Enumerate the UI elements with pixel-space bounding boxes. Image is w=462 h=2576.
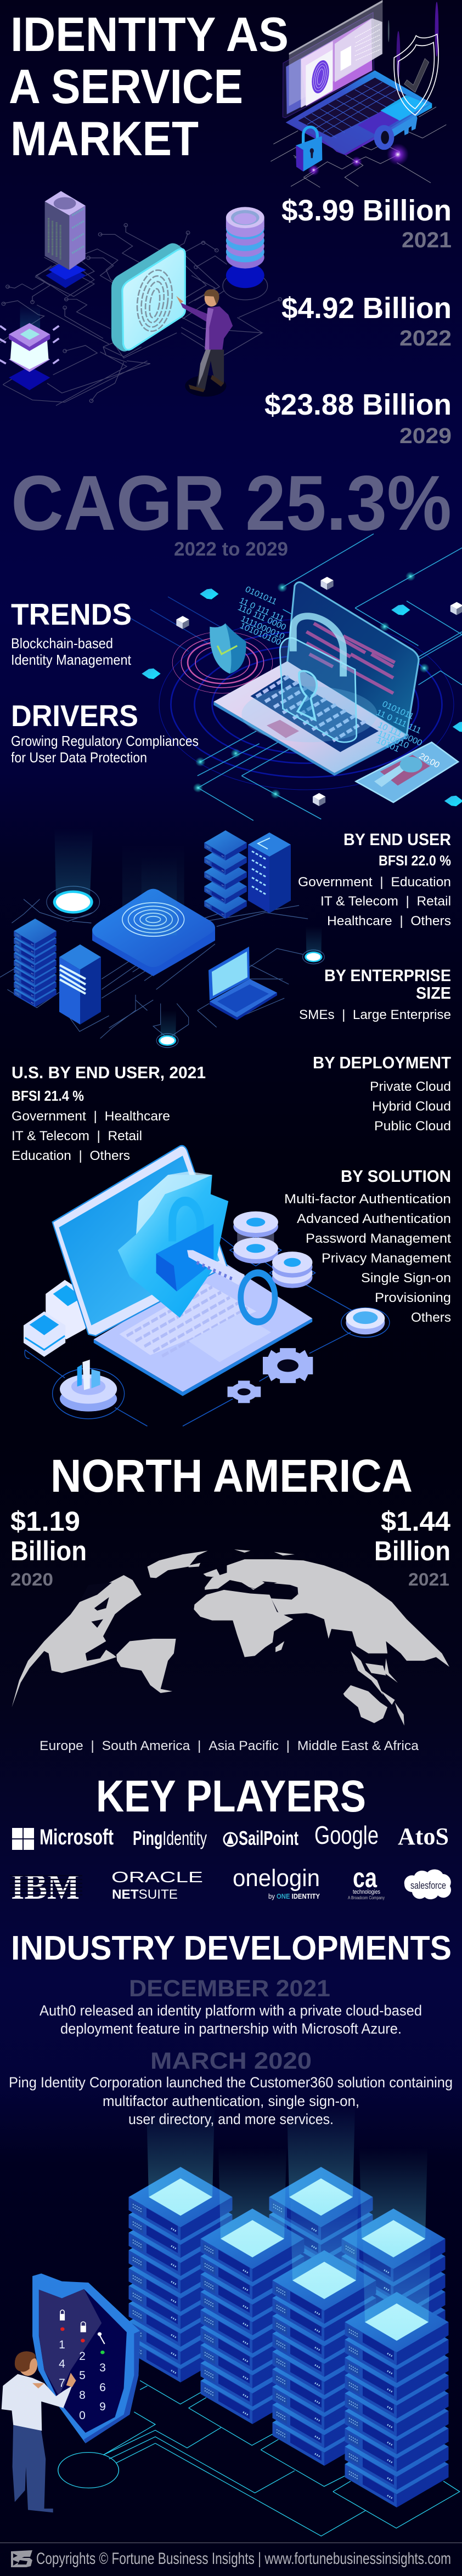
- fingerprint: [309, 59, 332, 95]
- server tower back left: [269, 2107, 373, 2382]
- U.S. by end user: Education | Others: [12, 1148, 130, 1163]
- logo: Google: Google: [314, 1821, 379, 1849]
- industry developments heading: INDUSTRY DEVELOPMENTS: [11, 1929, 452, 1967]
- title: [9, 7, 289, 166]
- market values: 2022: [399, 326, 452, 350]
- U.S. by end user: [12, 1063, 206, 1163]
- logo: Salesforce: salesforce: [410, 1880, 446, 1891]
- by end user: BFSI 22.0 %: [379, 852, 451, 869]
- logo: Oracle NetSuite: [111, 1869, 203, 1902]
- market values: 2021: [402, 228, 452, 252]
- by solution: Advanced Authentication: [297, 1211, 451, 1226]
- phone: 20:00: [417, 751, 441, 770]
- security shield keypad: 9: [99, 2401, 106, 2413]
- laptop base: [213, 661, 407, 773]
- north america 2020 value: [10, 1506, 87, 1589]
- title: MARKET: [10, 111, 199, 166]
- logo: Oracle NetSuite: ORACLE: [111, 1869, 203, 1886]
- illustration: glass padlock laptop with shield and phone: 11 0 111 111: [238, 596, 285, 624]
- security shield keypad: 4: [59, 2358, 65, 2370]
- by deployment: Hybrid Cloud: [372, 1099, 451, 1114]
- industry development: March 2020: [9, 2048, 453, 2127]
- by end user: IT & Telecom | Retail: [320, 894, 451, 909]
- drivers: [11, 699, 199, 766]
- by deployment: Public Cloud: [374, 1119, 451, 1134]
- drivers: for User Data Protection: [11, 749, 147, 766]
- logo: IBM: IBM: [11, 1867, 80, 1907]
- by solution: Password Management: [306, 1231, 451, 1246]
- by solution: Others: [411, 1310, 451, 1325]
- trends: Identity Management: [11, 652, 132, 668]
- logo: CA Technologies: [348, 1862, 385, 1900]
- logo: CA Technologies: A Broadcom Company: [348, 1895, 385, 1900]
- key: [391, 115, 418, 137]
- by solution: BY SOLUTION: [341, 1167, 451, 1186]
- chart disk: [60, 1360, 117, 1412]
- illustration: glass padlock laptop with shield and phone: 1111000010: [239, 614, 286, 642]
- security shield keypad: 2: [79, 2350, 86, 2363]
- north america 2021 value: 2021: [408, 1570, 449, 1589]
- logo: CA Technologies: technologies: [353, 1889, 380, 1895]
- north america heading: NORTH AMERICA: [50, 1450, 413, 1502]
- logo: OneLogin: onelogin: [233, 1865, 320, 1892]
- industry development: December 2021: DECEMBER 2021: [129, 1975, 330, 2002]
- by deployment: BY DEPLOYMENT: [313, 1053, 451, 1072]
- CAGR: 2022 to 2029: [174, 539, 288, 560]
- server tower front left: [128, 2107, 233, 2382]
- title: A SERVICE: [9, 59, 243, 114]
- logo: Ping Identity: PingIdentity: [133, 1827, 207, 1849]
- by solution: Provisioning: [375, 1290, 451, 1305]
- logo: CA Technologies: ca: [353, 1862, 378, 1893]
- man: [176, 289, 233, 397]
- man using keypad: [2, 2351, 76, 2512]
- gears: [228, 1348, 313, 1403]
- small shield: [210, 624, 246, 673]
- market values: $23.88 Billion: [264, 388, 452, 421]
- other regions: Europe | South America | Asia Pacific | Middle East & Africa: [40, 1739, 419, 1753]
- server stack left: [14, 919, 57, 1007]
- U.S. by end user: U.S. BY END USER, 2021: [12, 1063, 206, 1082]
- fingerprint pad: [92, 889, 215, 976]
- logo: Microsoft: Microsoft: [40, 1825, 114, 1849]
- left devices: [24, 1280, 88, 1357]
- glass screens: [289, 0, 382, 106]
- trends: Blockchain-based: [11, 635, 113, 652]
- floating disks: [233, 1211, 385, 1334]
- main laptop: [53, 1146, 312, 1396]
- drivers: Growing Regulatory Compliances: [11, 733, 199, 749]
- logo: OneLogin: by ONE IDENTITY: [268, 1892, 320, 1900]
- laptop screen: [288, 582, 419, 735]
- padlock: [172, 1201, 200, 1242]
- U.S. by end user: BFSI 21.4 %: [12, 1088, 84, 1104]
- industry development: December 2021: deployment feature in partnership with Microsoft Azure.: [60, 2020, 402, 2037]
- database: [226, 207, 264, 288]
- server tower back right: [341, 2148, 446, 2424]
- security shield keypad: 6: [99, 2381, 106, 2394]
- logo: Oracle NetSuite: NETSUITE: [112, 1887, 178, 1902]
- shield outline: [394, 34, 438, 115]
- key players heading: KEY PLAYERS: [96, 1771, 366, 1821]
- key: [187, 1250, 245, 1285]
- security shield keypad: 7: [59, 2377, 65, 2390]
- security shield keypad: 1: [59, 2339, 65, 2351]
- by enterprise size: SIZE: [416, 983, 451, 1003]
- market values: $3.99 Billion: [281, 194, 452, 227]
- security shield keypad: 3: [99, 2362, 106, 2374]
- by solution: Single Sign-on: [361, 1271, 451, 1286]
- U.S. by end user: Government | Healthcare: [12, 1109, 170, 1124]
- north america 2021 value: $1.44: [381, 1506, 450, 1537]
- by end user: [298, 830, 451, 929]
- logo: Atos: AtoS: [398, 1823, 449, 1850]
- by solution: Multi-factor Authentication: [284, 1192, 451, 1207]
- illustration: glass padlock laptop with shield and phone: 10 111 0000: [376, 721, 424, 748]
- security shield keypad: 5: [79, 2369, 86, 2382]
- server tower upper right: [248, 833, 291, 913]
- security shield keypad: 8: [79, 2389, 86, 2402]
- north america 2020 value: $1.19: [10, 1506, 80, 1537]
- server tower front right: [345, 2232, 449, 2507]
- north america 2020 value: 2020: [10, 1570, 53, 1589]
- industry development: December 2021: Auth0 released an identity platform with a private cloud-based: [40, 2002, 422, 2019]
- server tower left: [59, 944, 101, 1024]
- illustration: glass padlock laptop with shield and phone: 110 111 0000: [236, 603, 288, 632]
- illustration: glass padlock laptop with shield and phone: 10101: [375, 736, 401, 754]
- phone: [356, 742, 458, 802]
- illustration: circuit lines, server rack, database, fingerprint card, man: [0, 223, 281, 406]
- illustration: blue data centre with fingerprint pad: [0, 829, 324, 1048]
- north america 2021 value: Billion: [374, 1536, 450, 1566]
- illustration: laptop with shield, padlock and key: [24, 1146, 390, 1426]
- market values: $4.92 Billion: [281, 292, 452, 325]
- trends: TRENDS: [11, 597, 132, 631]
- by enterprise size: [299, 966, 451, 1022]
- title: IDENTITY AS: [10, 7, 289, 61]
- logo: SailPoint: SailPoint: [239, 1827, 298, 1849]
- small laptop: [209, 947, 277, 1020]
- drivers: DRIVERS: [11, 699, 138, 733]
- illustration: glass padlock laptop with shield and phone: 0101011: [381, 700, 415, 721]
- logo: Microsoft: [12, 1825, 114, 1850]
- by enterprise size: SMEs | Large Enterprise: [299, 1007, 451, 1022]
- market values: 2029: [399, 424, 452, 448]
- security shield keypad: 0: [79, 2409, 86, 2422]
- footer logo: [11, 2550, 32, 2567]
- industry development: March 2020: user directory, and more services.: [128, 2111, 334, 2127]
- industry development: December 2021: [40, 1975, 422, 2037]
- pad beam: [122, 844, 184, 923]
- chip: [0, 305, 59, 390]
- logo: SailPoint: [224, 1827, 298, 1849]
- U.S. by end user: IT & Telecom | Retail: [12, 1129, 142, 1143]
- illustration: glass padlock laptop with shield and phone: 11 0 111 111: [375, 708, 422, 735]
- padlock: [303, 127, 317, 146]
- laptop base: [286, 70, 432, 155]
- world map globe: [12, 1549, 449, 1725]
- shield: [118, 1171, 275, 1322]
- security shield keypad: [32, 2273, 140, 2443]
- illustration: laptop with fingerprint screen, shield, key and lock: [271, 0, 446, 188]
- by end user: BY END USER: [343, 830, 451, 849]
- by deployment: [313, 1053, 451, 1134]
- trends: [11, 597, 132, 668]
- glow pads: [53, 829, 322, 1046]
- industry development: March 2020: MARCH 2020: [150, 2048, 312, 2074]
- glass padlock: [280, 616, 357, 742]
- by deployment: Private Cloud: [370, 1079, 451, 1094]
- illustration: glass padlock laptop with shield and phone: 101010100: [238, 621, 283, 647]
- fingerprint card: [111, 243, 185, 352]
- server tower centre right: [272, 2190, 376, 2466]
- logo: Salesforce: [404, 1870, 451, 1899]
- by enterprise size: BY ENTERPRISE: [324, 966, 451, 985]
- market values: [264, 194, 452, 448]
- by solution: Privacy Management: [322, 1251, 451, 1266]
- illustration: glass padlock laptop with shield and phone: 1110010: [376, 729, 410, 750]
- north america 2021 value: [374, 1506, 450, 1589]
- server stack upper left: [204, 830, 247, 919]
- server towers illustration: [58, 2107, 460, 2536]
- server tower middle: [201, 2148, 304, 2424]
- north america 2020 value: Billion: [10, 1536, 87, 1566]
- industry development: March 2020: multifactor authentication, single sign-on,: [103, 2093, 359, 2109]
- by end user: Healthcare | Others: [327, 914, 451, 929]
- laptop lid: [283, 13, 374, 118]
- illustration: glass padlock laptop with shield and phone: [129, 534, 462, 820]
- by solution: [284, 1167, 451, 1325]
- illustration: glass padlock laptop with shield and phone: 0101011: [244, 585, 278, 607]
- server rack: [45, 191, 86, 288]
- by end user: Government | Education: [298, 875, 451, 890]
